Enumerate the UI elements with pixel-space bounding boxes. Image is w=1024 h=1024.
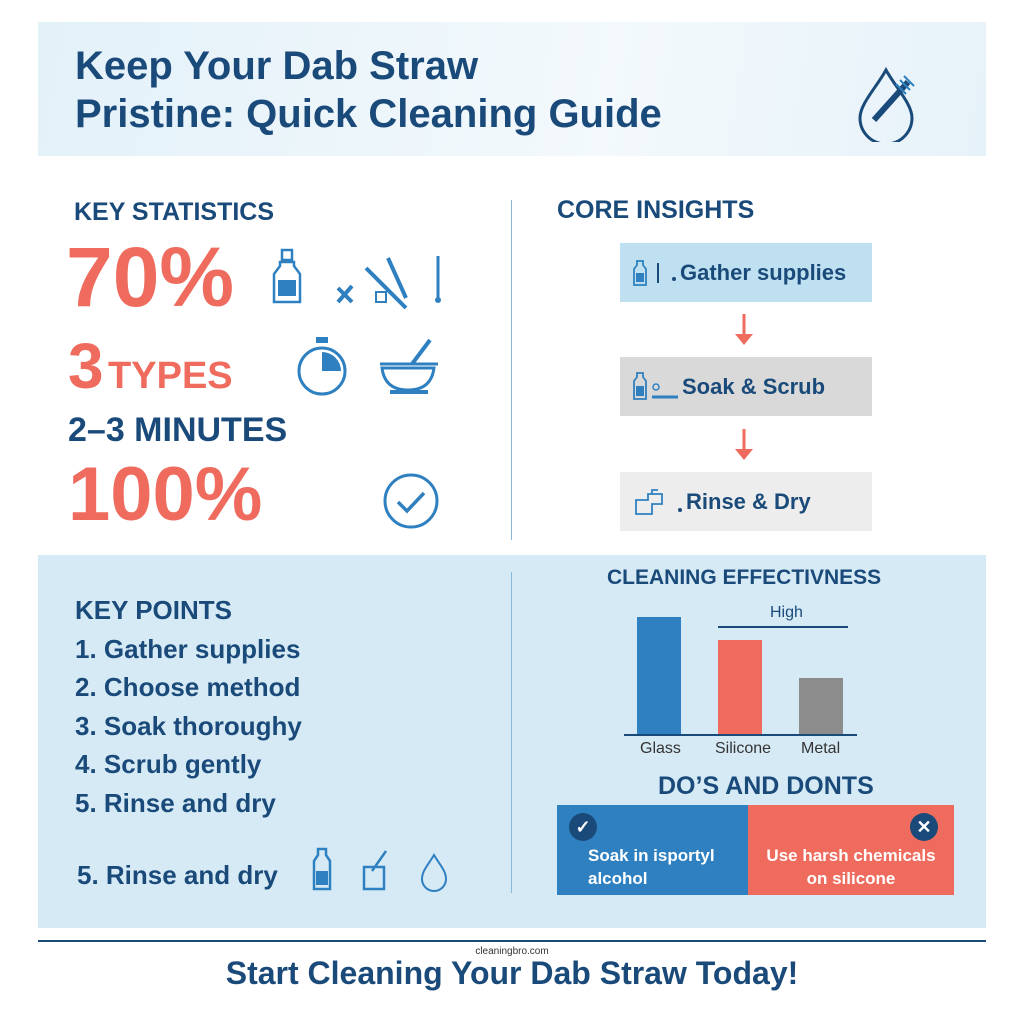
chart: cleaning effectiveness: Silicone (715, 740, 771, 757)
chart: cleaning effectiveness (607, 566, 881, 757)
title: Keep Your Dab Straw (75, 44, 478, 88)
step 2 box: Soak & Scrub (682, 374, 825, 399)
bottom panel (38, 555, 986, 928)
stat 70%: 70% (66, 230, 234, 324)
step 2 box (620, 357, 872, 416)
key points list: 2. Choose method (75, 672, 300, 702)
heading: key statistics: KEY STATISTICS (74, 198, 274, 226)
icon: stopwatch (298, 337, 346, 396)
heading: do's and donts: DO’S AND DONTS (658, 772, 874, 800)
step 3 box: Rinse & Dry (686, 489, 811, 514)
step 1 box: Gather supplies (680, 260, 846, 285)
do box: Soak in isportyl (588, 846, 715, 865)
last item with icons: 5. Rinse and dry (77, 860, 278, 890)
arrow 1 (735, 314, 753, 345)
footer url: cleaningbro.com (475, 946, 549, 957)
title: Pristine: Quick Cleaning Guide (75, 92, 662, 136)
dont box: ✕ (916, 817, 932, 837)
do box (557, 805, 748, 895)
key points list (75, 595, 302, 818)
footer call to action: Start Cleaning Your Dab Straw Today! (226, 955, 798, 991)
icon: bowl (380, 338, 438, 394)
dont box (748, 805, 954, 895)
step 1 box (620, 243, 872, 302)
stat 2-3 minutes: 2–3 MINUTES (68, 411, 287, 449)
dont box: on silicone (807, 869, 895, 888)
chart: cleaning effectiveness: CLEANING EFFECTIVNESS (607, 566, 881, 589)
key points list: KEY POINTS (75, 595, 232, 625)
icon: check circle (384, 474, 438, 528)
heading: core insights: CORE INSIGHTS (557, 196, 754, 224)
title (75, 44, 662, 136)
header band (38, 22, 986, 156)
do box: alcohol (588, 869, 648, 888)
arrow 2 (735, 429, 753, 460)
key points list: 5. Rinse and dry (75, 788, 276, 818)
chart: cleaning effectiveness: Glass (640, 740, 681, 757)
do box: ✓ (575, 817, 591, 837)
icon: water drop with brush (858, 67, 915, 142)
chart: cleaning effectiveness: Metal (801, 740, 840, 757)
step 3 box (620, 472, 872, 531)
key points list: 4. Scrub gently (75, 749, 261, 779)
chart: cleaning effectiveness: High (770, 604, 803, 621)
key points list: 3. Soak thoroughy (75, 711, 302, 741)
stat 3 types: 3 TYPES (68, 330, 233, 402)
stat 100%: 100% (68, 452, 262, 537)
key points list: 1. Gather supplies (75, 634, 300, 664)
icons: supplies (272, 248, 441, 310)
dont box: Use harsh chemicals (766, 846, 936, 865)
